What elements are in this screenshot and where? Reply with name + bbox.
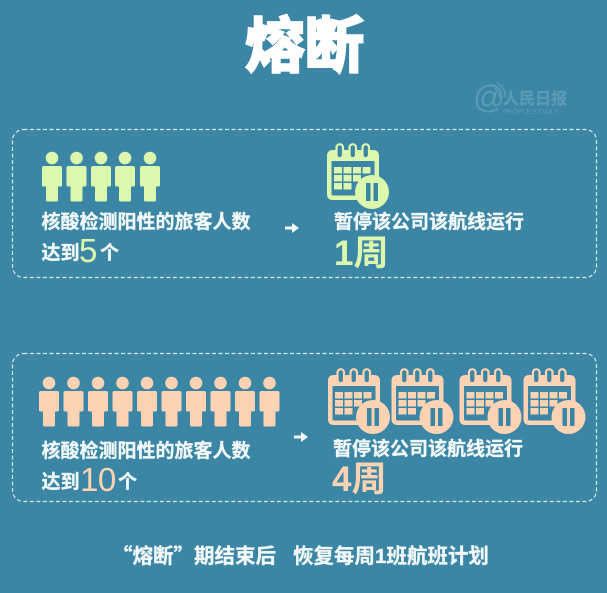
condition text: 核酸检测阳性的旅客人数 xyxy=(42,439,251,462)
panel: 5 passengers rule xyxy=(12,130,596,278)
condition text: 个 xyxy=(118,471,137,493)
title: 熔断 xyxy=(245,13,364,80)
watermark: People's Daily logo xyxy=(473,79,567,116)
result text xyxy=(332,437,523,499)
result text: 暂停该公司该航线运行 xyxy=(333,437,523,460)
footer note: “熔断”期结束后 xyxy=(112,539,276,569)
footer note xyxy=(112,539,489,569)
footer note: 恢复每周1班航班计划 xyxy=(293,545,489,568)
condition text: 达到 xyxy=(42,471,80,493)
watermark: People's Daily logo: @ xyxy=(473,79,505,115)
condition text: 5 xyxy=(79,232,97,269)
condition text xyxy=(42,439,251,498)
calendar icon: paused xyxy=(327,144,389,209)
result text: 4周 xyxy=(332,460,386,499)
watermark: People's Daily logo: 人民日报 xyxy=(503,89,567,108)
watermark: People's Daily logo: PEOPLE'S DAILY xyxy=(503,109,559,116)
condition text: 核酸检测阳性的旅客人数 xyxy=(42,210,251,233)
condition text xyxy=(42,210,251,269)
panel: 10 passengers rule xyxy=(12,354,596,502)
condition text: 10 xyxy=(80,461,116,498)
calendar icons: 4 paused xyxy=(328,369,586,434)
arrow xyxy=(294,432,308,442)
people icons: 5 green xyxy=(42,152,160,202)
result text xyxy=(334,210,524,273)
condition text: 达到 xyxy=(42,242,80,264)
arrow xyxy=(285,223,299,233)
result text: 暂停该公司该航线运行 xyxy=(334,210,524,233)
people icons: 10 peach xyxy=(39,377,280,426)
result text: 1周 xyxy=(334,234,388,273)
condition text: 个 xyxy=(100,242,119,264)
